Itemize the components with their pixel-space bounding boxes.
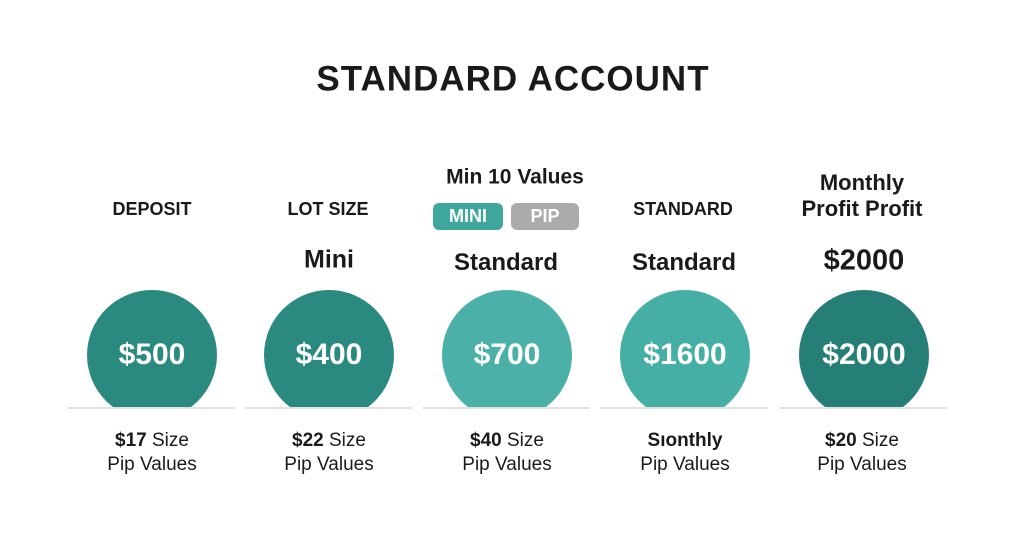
circle: $500: $500 (119, 338, 185, 371)
circle: $2000: $2000 (822, 338, 906, 371)
caption: $20 size: Pip Values (817, 454, 907, 475)
column 4: standard (620, 199, 750, 475)
pill: pip (511, 203, 579, 230)
caption: monthly (640, 430, 730, 475)
heading: deposit: DEPOSIT (112, 199, 192, 219)
heading: monthly profit (802, 170, 922, 221)
caption: $17 size: $17 Size (115, 430, 189, 451)
caption: $17 size: Pip Values (107, 454, 197, 475)
caption: $40 size: $40 Size (470, 430, 544, 451)
caption: $22 size: $22 Size (292, 430, 366, 451)
heading: min 10 values: Min 10 Values (446, 166, 584, 188)
heading: monthly profit: Monthly (820, 170, 904, 195)
subheading: mini: Mini (304, 246, 354, 274)
subheading: $2000: $2000 (824, 244, 904, 276)
heading: standard: STANDARD (633, 199, 733, 219)
circle: $500 (87, 290, 217, 407)
circle: $400 (264, 290, 394, 407)
heading: lot size: LOT SIZE (288, 199, 368, 219)
caption: monthly: Sıonthly (648, 430, 722, 451)
pill: mini: MINI (449, 206, 487, 226)
circle: $400: $400 (296, 338, 362, 371)
subheading: standard: Standard (632, 249, 736, 276)
subheading: standard: Standard (454, 249, 558, 276)
caption: $17 size (107, 430, 197, 475)
caption: $22 size (284, 430, 374, 475)
circle: $700 (442, 290, 572, 407)
caption: monthly: Pip Values (640, 454, 730, 475)
circle: $700: $700 (474, 338, 540, 371)
title: STANDARD ACCOUNT (316, 60, 710, 98)
column 1: deposit (87, 199, 217, 475)
pill: pip: PIP (530, 206, 560, 226)
caption: $40 size (462, 430, 552, 475)
caption: $20 size: $20 Size (825, 430, 899, 451)
circle: $1600: $1600 (643, 338, 727, 371)
caption: $22 size: Pip Values (284, 454, 374, 475)
pill: mini (433, 203, 503, 230)
caption: $20 size (817, 430, 907, 475)
caption: $40 size: Pip Values (462, 454, 552, 475)
circle: $2000 (799, 290, 929, 407)
column 3: min 10 values (433, 166, 584, 475)
circle: $1600 (620, 290, 750, 407)
heading: monthly profit: Profit Profit (802, 196, 922, 221)
column 2: lot size (264, 199, 394, 475)
column 5: monthly profit (799, 170, 929, 475)
